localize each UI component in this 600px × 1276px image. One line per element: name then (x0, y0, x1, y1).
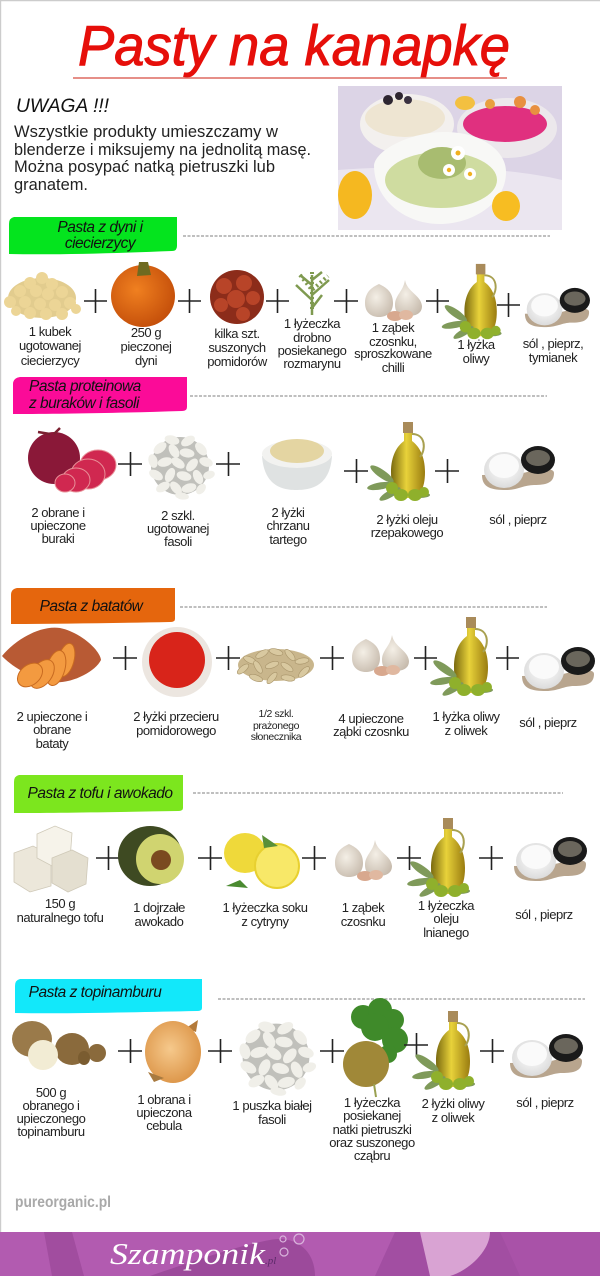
icon: beetroot (28, 428, 116, 492)
ingredient labels row 2: 2 szkl. (161, 508, 195, 523)
ingredient labels row 5: sól , pieprz (516, 1095, 574, 1110)
plus (216, 452, 240, 476)
ingredient labels row 2: fasoli (164, 534, 192, 549)
plus (480, 1039, 504, 1063)
ingredient labels row 1: dyni (135, 353, 158, 368)
section header: Pasta z dyni i ciecierzycy (9, 217, 177, 254)
plus (178, 289, 201, 313)
ingredient labels row 4: lnianego (423, 925, 469, 940)
icon: tomato paste (142, 627, 212, 697)
ingredient labels row 2: rzepakowego (371, 525, 443, 540)
section header: Pasta z tofu i awokado: Pasta z tofu i awokado (28, 785, 173, 802)
plus (397, 846, 421, 870)
ingredient labels row 1: ciecierzycy (21, 353, 80, 368)
ingredient labels row 5: cząbru (354, 1148, 390, 1163)
icon: olive oil (441, 264, 502, 341)
section header: Pasta z tofu i awokado (14, 775, 183, 813)
footer banner (0, 1232, 600, 1276)
icon: bowl of horseradish (262, 439, 332, 490)
ingredient labels row 5: natki pietruszki (333, 1122, 412, 1137)
icon: salt and pepper (522, 647, 595, 691)
ingredient labels row 3: ząbki czosnku (333, 724, 409, 739)
ingredient labels row 1: suszonych (208, 340, 266, 355)
ingredient labels row 3: obrane (33, 722, 71, 737)
notice text block: UWAGA !!! (16, 96, 110, 117)
plus (84, 289, 107, 313)
icon: olive oil (412, 1011, 475, 1092)
section header: Pasta z topinamburu (15, 979, 202, 1013)
ingredient labels row 2: 2 łyżki oleju (376, 512, 438, 527)
icon: salt and pepper (514, 837, 587, 881)
ingredient labels row 3: 1 łyżka oliwy (432, 709, 501, 724)
notice text block (14, 96, 311, 194)
icon: Jerusalem artichokes (12, 1021, 106, 1070)
icon: olive oil (367, 422, 430, 503)
plus (479, 846, 503, 870)
plus (198, 846, 222, 870)
ingredient labels row 1: czosnku, (369, 334, 417, 349)
icon: lemons (224, 833, 299, 888)
ingredient labels row 5: 2 łyżki oliwy (422, 1096, 485, 1111)
ingredient labels row 4: awokado (135, 914, 184, 929)
ingredient labels row 3: bataty (36, 736, 69, 751)
icon: olive oil (407, 818, 470, 899)
plus (497, 293, 520, 317)
ingredient labels row 4: 1 ząbek (342, 900, 385, 915)
ingredient labels row 3: z oliwek (445, 723, 488, 738)
ingredient labels row 1: pomidorów (207, 354, 268, 369)
ingredient labels row 3: słonecznika (251, 731, 302, 743)
plus (96, 846, 120, 870)
icon: sunflower seeds (236, 647, 314, 685)
ingredient labels row 5: cebula (146, 1118, 183, 1133)
icon: garlic (365, 280, 422, 321)
plus (426, 289, 449, 313)
ingredient labels row 1: 250 g (131, 325, 161, 340)
ingredient labels row 3: 2 łyżki przecieru (133, 709, 219, 724)
ingredient labels row 5: 1 obrana i (137, 1092, 191, 1107)
ingredient labels row 2: upieczone (30, 518, 86, 533)
ingredient labels row 5: z oliwek (432, 1110, 475, 1125)
ingredient labels row 3: 4 upieczone (338, 711, 404, 726)
icon: tofu cubes (14, 826, 88, 892)
plus (344, 459, 368, 483)
plus (266, 289, 289, 313)
icon: garlic (335, 840, 392, 881)
icon: garlic (352, 635, 409, 676)
ingredient labels row 5: upieczona (136, 1105, 193, 1120)
source credit: pureorganic.pl (15, 1194, 111, 1211)
ingredient labels row 1: 1 kubek (29, 324, 72, 339)
plus (414, 646, 437, 670)
ingredient labels row 5: oraz suszonego (329, 1135, 415, 1150)
icon: onion (145, 1020, 201, 1083)
ingredient labels row 4: 1 łyżeczka soku (222, 900, 308, 915)
ingredient labels row 4: naturalnego tofu (17, 910, 104, 925)
icon: salt and pepper (482, 446, 555, 490)
section header: Pasta z batatów: Pasta z batatów (40, 598, 145, 615)
plus (496, 646, 519, 670)
ingredient labels row 5: fasoli (258, 1112, 286, 1127)
section header: Pasta z dyni i ciecierzycy: Pasta z dyni i (57, 219, 144, 236)
section header: Pasta z dyni i ciecierzycy: ciecierzycy (65, 235, 137, 252)
footer banner: .pl (265, 1255, 276, 1267)
ingredient labels row 5: 1 puszka białej (232, 1098, 312, 1113)
ingredient labels row 1: rozmarynu (283, 356, 341, 371)
ingredient labels row 4: oleju (433, 911, 459, 926)
section header: Pasta proteinowa z buraków i fasoli: Pasta proteinowa (29, 378, 142, 395)
title: Pasty na kanapkę (78, 14, 510, 78)
plus (334, 289, 358, 313)
notice text block: granatem. (14, 175, 88, 194)
ingredient labels row 1: tymianek (529, 350, 578, 365)
plus (118, 1039, 142, 1063)
notice text block: Można posypać natką pietruszki lub (14, 157, 275, 176)
ingredient labels row 5: obranego i (23, 1098, 80, 1113)
ingredient labels row 2: buraki (42, 531, 75, 546)
ingredient labels row 1 (19, 316, 583, 375)
ingredient labels row 1: sól , pieprz, (523, 336, 583, 351)
ingredient labels row 4: czosnku (341, 914, 385, 929)
icon: white beans (238, 1019, 317, 1097)
icon: white beans (147, 433, 216, 501)
ingredient labels row 3: 2 upieczone i (17, 709, 88, 724)
footer banner: Szamponik (110, 1236, 266, 1271)
icon: rosemary herb (296, 272, 329, 315)
ingredient labels row 4: sól , pieprz (515, 907, 573, 922)
notice text block: Wszystkie produkty umieszczamy w (14, 122, 279, 141)
ingredient labels row 4: 1 dojrzałe (133, 900, 185, 915)
plus (404, 1033, 428, 1057)
icon: chickpeas (4, 272, 81, 320)
icon: avocado (118, 826, 184, 886)
ingredient labels row 5: topinamburu (17, 1124, 85, 1139)
ingredient labels row 2: 2 obrane i (31, 505, 85, 520)
icon: sun-dried tomatoes (210, 270, 264, 324)
ingredient labels row 1: pieczonej (121, 339, 172, 354)
plus (302, 846, 326, 870)
ingredient labels row 3: pomidorowego (136, 723, 216, 738)
ingredient labels row 4 (17, 896, 573, 940)
icon: salt and pepper (510, 1034, 583, 1078)
ingredient labels row 5: 500 g (36, 1085, 66, 1100)
ingredient labels row 4: 1 łyżeczka (418, 898, 475, 913)
ingredient labels row 4: z cytryny (241, 914, 290, 929)
plus (118, 452, 142, 476)
notice text block: blenderze i miksujemy na jednolitą masę. (14, 140, 311, 159)
ingredient labels row 3: 1/2 szkl. (259, 708, 293, 720)
ingredient labels row 2 (30, 505, 547, 549)
section header: Pasta z batatów (11, 588, 175, 624)
ingredient labels row 1: posiekanego (278, 343, 347, 358)
ingredient labels row 3 (17, 708, 577, 751)
photo: three bowls of spreads (338, 86, 562, 230)
icon: olive oil (430, 617, 493, 698)
section header: Pasta proteinowa z buraków i fasoli: z buraków i fasoli (28, 395, 140, 412)
ingredient labels row 1: chilli (382, 360, 405, 375)
ingredient labels row 1: kilka szt. (214, 326, 260, 341)
ingredient labels row 2: tartego (269, 532, 307, 547)
ingredient labels row 2: 2 łyżki (272, 505, 305, 520)
ingredient labels row 1: 1 łyżka (457, 337, 496, 352)
ingredient labels row 4: 150 g (45, 896, 75, 911)
section header: Pasta z topinamburu: Pasta z topinamburu (29, 984, 162, 1001)
ingredient labels row 1: sproszkowane (354, 346, 432, 361)
ingredient labels row 1: oliwy (463, 351, 490, 366)
plus (320, 646, 344, 670)
icon: parsley and dried thyme (343, 998, 408, 1097)
ingredient labels row 5: posiekanej (343, 1108, 401, 1123)
ingredient labels row 5: 1 łyżeczka (344, 1095, 401, 1110)
plus (320, 1039, 344, 1063)
icon: pumpkin (111, 262, 175, 327)
ingredient labels row 5: upieczonego (17, 1111, 86, 1126)
ingredient labels row 3: sól , pieprz (519, 715, 577, 730)
plus (216, 646, 240, 670)
icon: salt and pepper (525, 288, 590, 327)
plus (113, 646, 137, 670)
section header: Pasta proteinowa z buraków i fasoli (13, 377, 187, 414)
ingredient labels row 1: 1 ząbek (372, 320, 415, 335)
icon: sweet potatoes (2, 628, 101, 693)
ingredient labels row 2: sól , pieprz (489, 512, 547, 527)
ingredient labels row 1: ugotowanej (19, 338, 82, 353)
ingredient labels row 1: drobno (293, 330, 331, 345)
ingredient labels row 3: prażonego (253, 720, 300, 732)
ingredient labels row 2: chrzanu (266, 518, 310, 533)
ingredient labels row 5 (17, 1085, 574, 1163)
ingredient labels row 1: 1 łyżeczka (284, 316, 341, 331)
ingredient labels row 2: ugotowanej (147, 521, 210, 536)
plus (208, 1039, 232, 1063)
plus (435, 459, 459, 483)
